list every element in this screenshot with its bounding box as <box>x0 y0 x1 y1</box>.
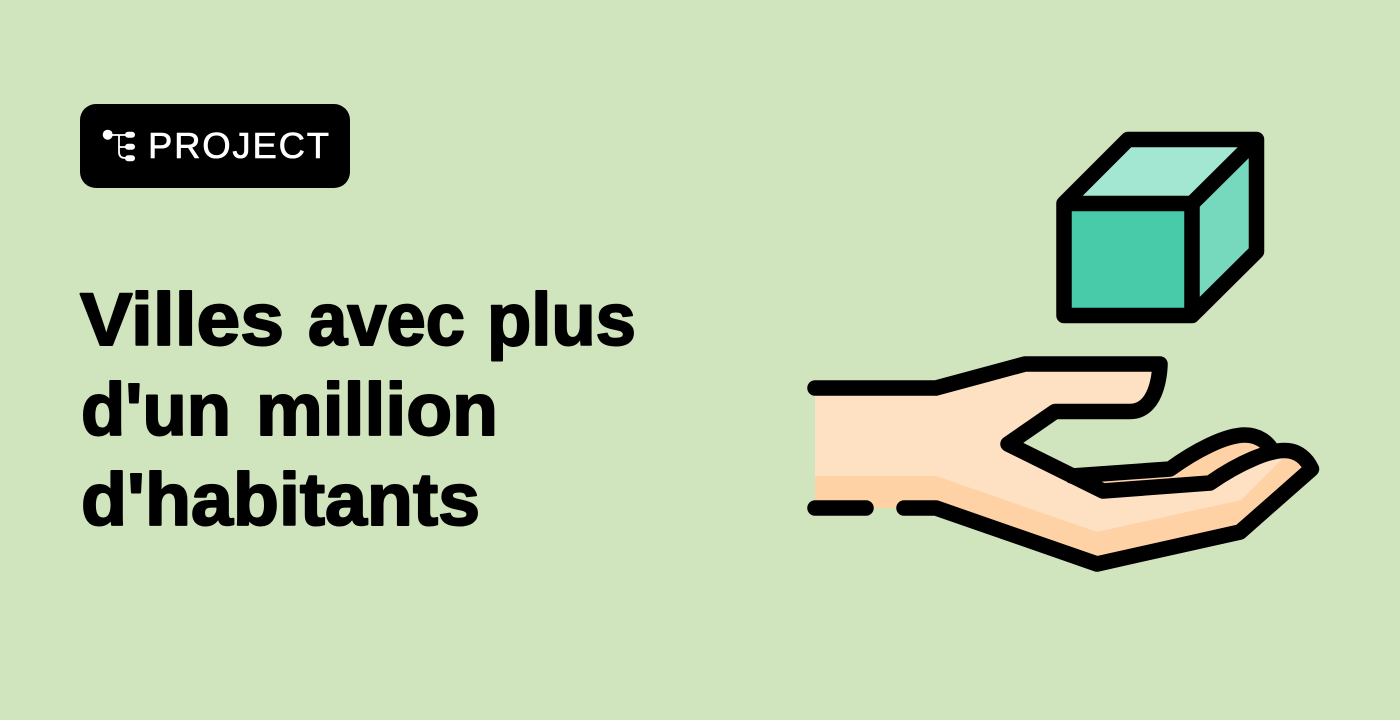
cube outline <box>1064 140 1256 316</box>
cube top face <box>1064 140 1256 204</box>
badge: project label <box>80 104 350 188</box>
badge text: PROJECT <box>148 125 329 166</box>
cube right face <box>1192 140 1256 316</box>
hand outline <box>815 364 1312 564</box>
title: d'un <box>81 368 231 451</box>
icon: cube <box>1064 140 1256 316</box>
title: avec <box>308 278 465 361</box>
title <box>80 278 636 541</box>
icon: project tree <box>103 130 132 158</box>
title: million <box>256 368 498 451</box>
title: d'habitants <box>81 458 480 541</box>
icon: open hand <box>815 364 1312 564</box>
hand shadow <box>815 455 1312 564</box>
hand palm fill <box>815 364 1312 564</box>
cube front face <box>1064 204 1192 316</box>
title: plus <box>487 278 636 361</box>
title: Villes <box>80 278 284 361</box>
hand fingers fill <box>1072 435 1273 495</box>
